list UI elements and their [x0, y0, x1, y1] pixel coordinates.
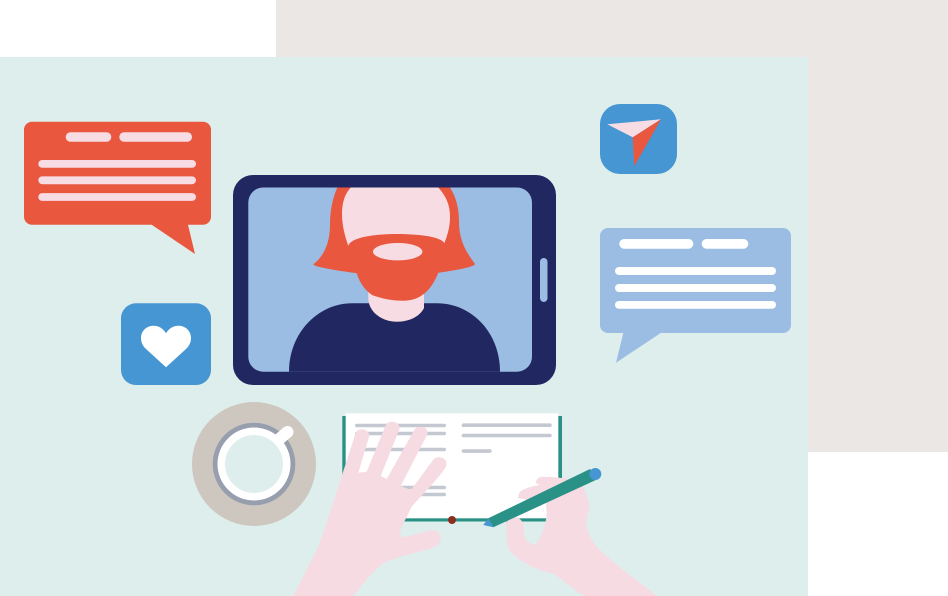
person: hair and beard — [313, 188, 475, 301]
person: body — [289, 303, 500, 372]
person: neck — [368, 285, 424, 322]
panel: mint background — [0, 57, 808, 596]
cup inside — [225, 435, 283, 493]
tablet button — [540, 258, 548, 302]
left hand — [293, 422, 447, 596]
coffee cup on saucer — [192, 402, 316, 526]
notebook spine dot — [448, 516, 456, 524]
pencil body — [488, 469, 598, 527]
tablet body — [233, 175, 556, 385]
person: mouth — [373, 243, 422, 260]
open notebook — [342, 413, 562, 524]
tablet screen — [248, 188, 532, 372]
pencil — [483, 468, 601, 527]
right hand — [506, 477, 657, 596]
tablet with video call — [233, 175, 556, 385]
panel: beige background — [276, 0, 948, 452]
person: face — [342, 188, 450, 246]
saucer — [192, 402, 316, 526]
notebook right page lines — [462, 423, 552, 453]
icon: heart — [121, 303, 211, 385]
speech bubble: blue — [600, 228, 791, 363]
notebook pages — [346, 413, 558, 518]
cup rim — [213, 423, 295, 505]
cup handle — [277, 432, 288, 441]
notebook left page lines — [355, 424, 446, 496]
speech bubble: red — [24, 122, 211, 254]
icon: paper plane — [600, 104, 677, 174]
notebook cover — [342, 416, 562, 522]
pencil tip — [483, 518, 493, 527]
pencil cap — [589, 468, 601, 480]
cup wall — [218, 428, 290, 500]
